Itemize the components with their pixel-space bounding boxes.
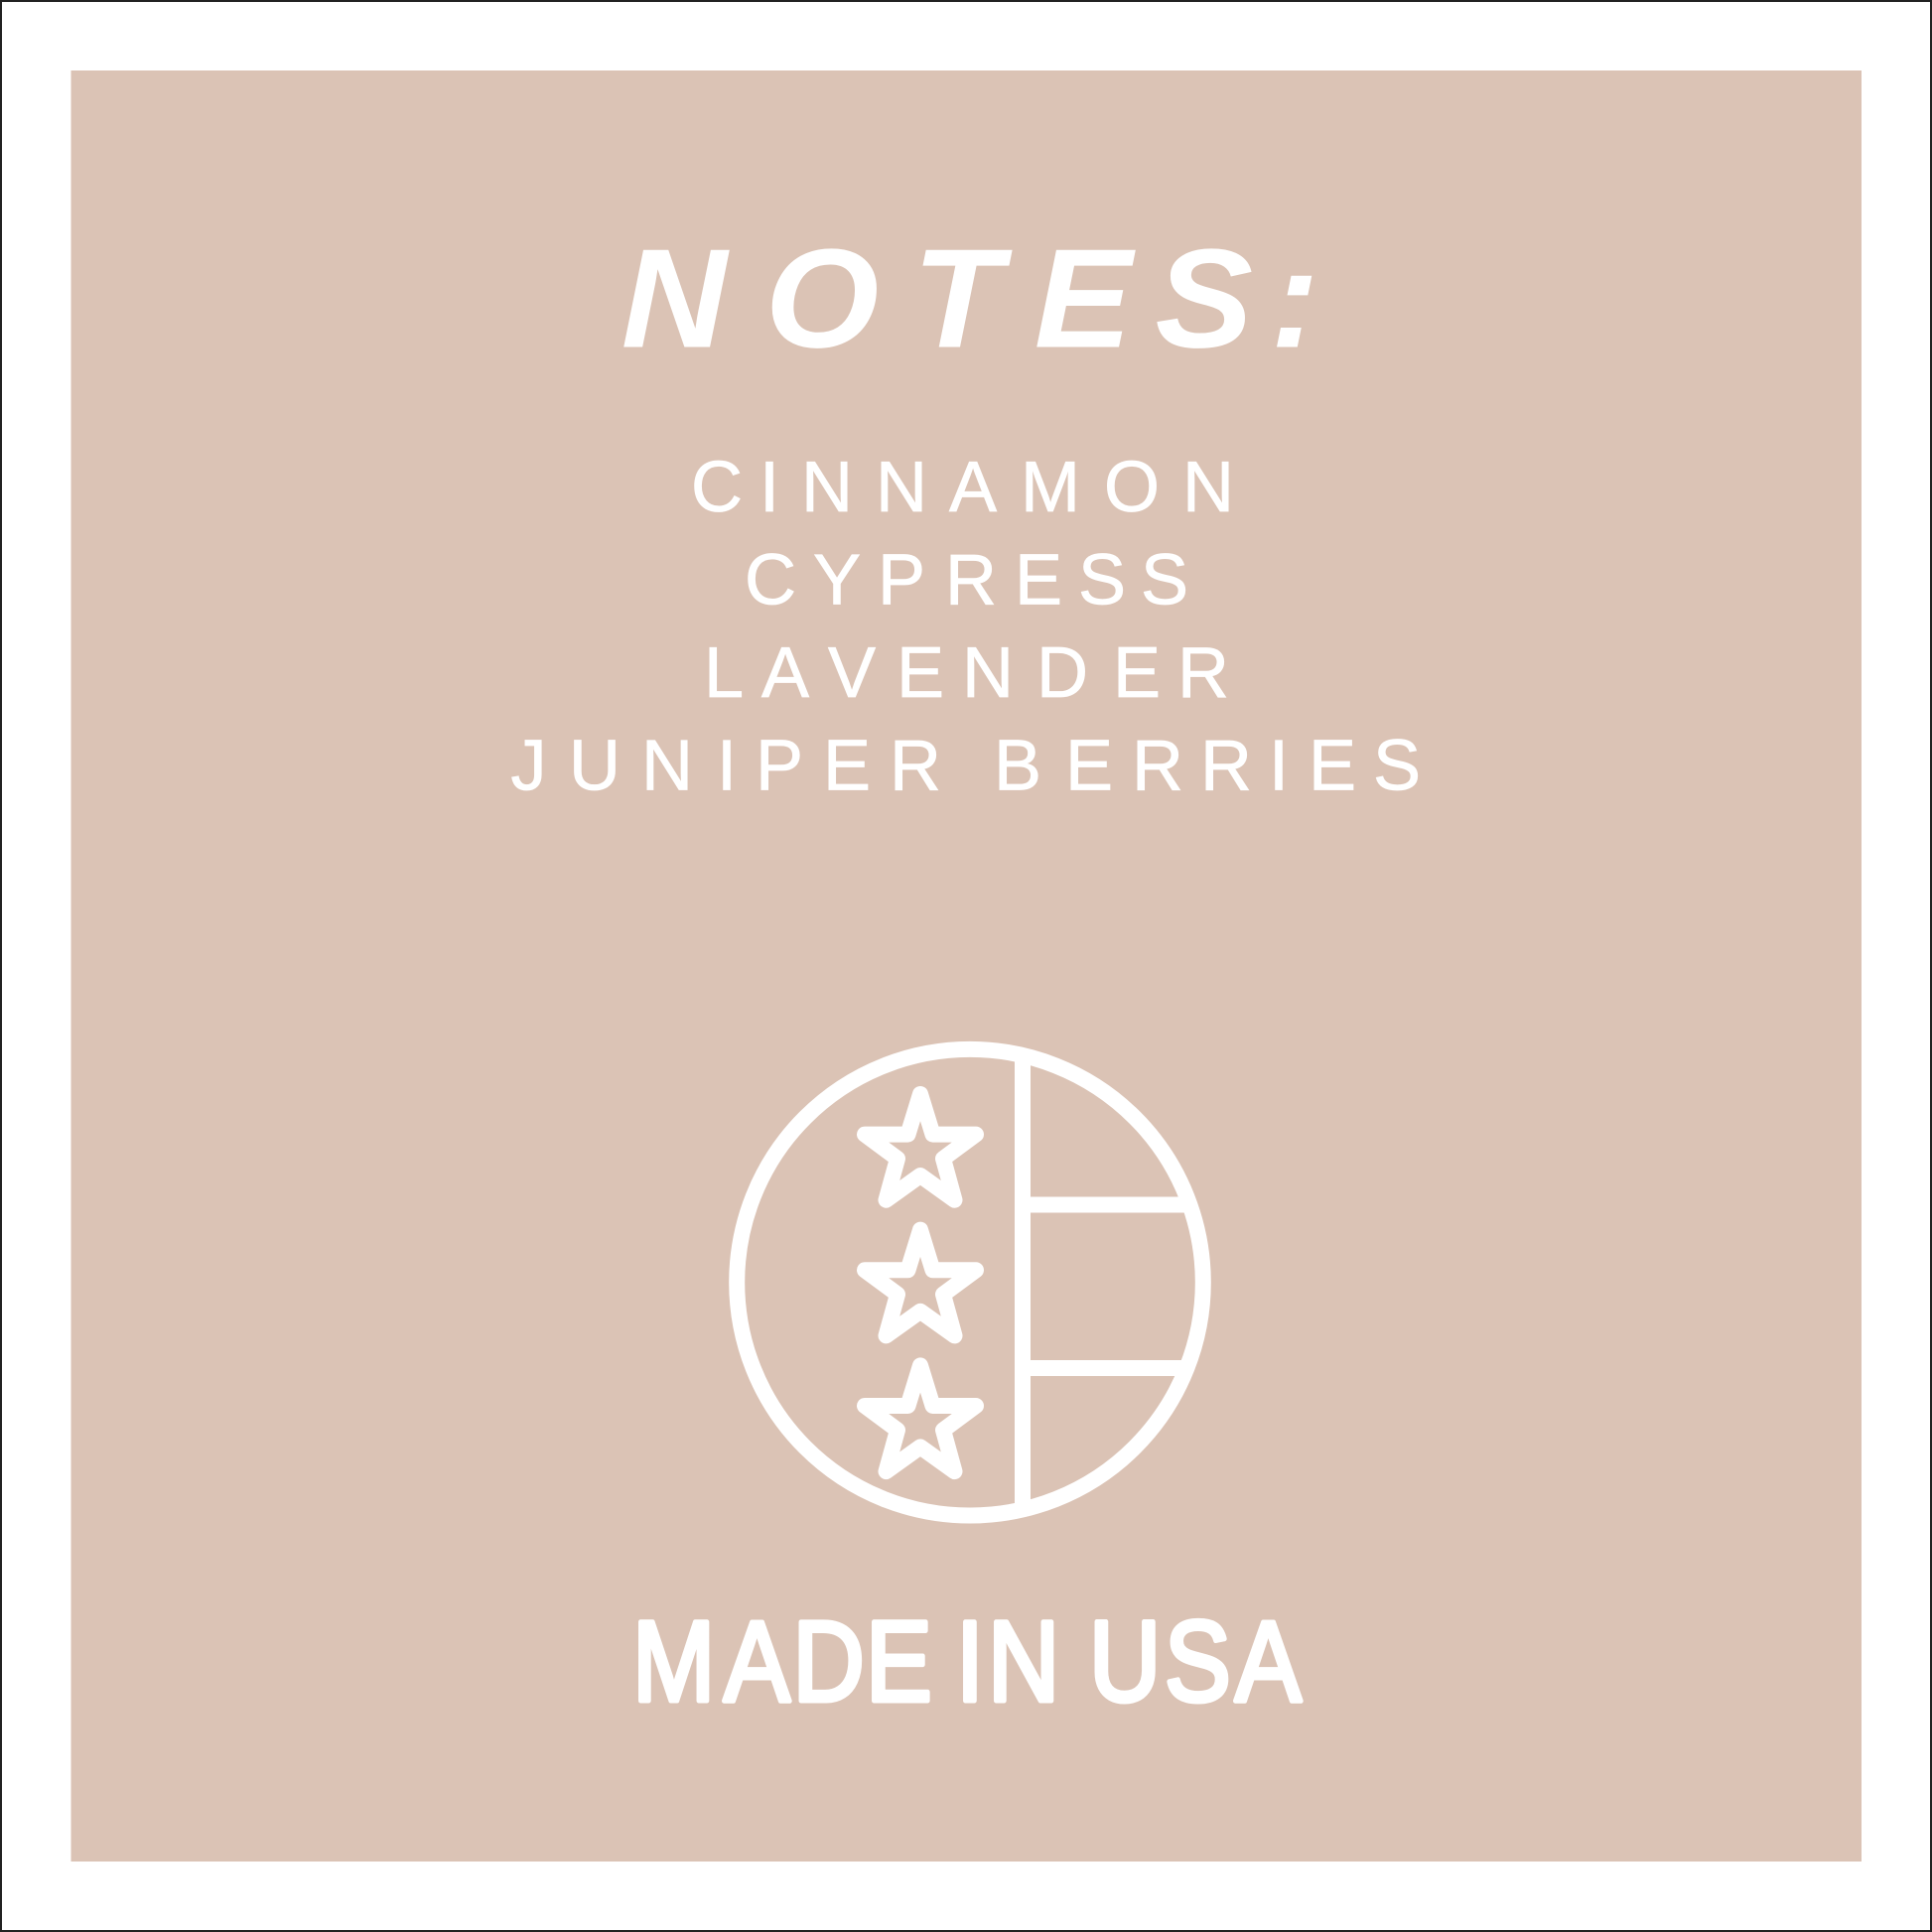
ingredient list <box>510 448 1421 806</box>
icon: upper stripe <box>1023 1197 1189 1213</box>
icon: bottom star <box>865 1365 976 1471</box>
ingredient: cypress: CYPRESS <box>745 540 1188 620</box>
ingredient: juniper berries: JUNIPER BERRIES <box>510 727 1421 806</box>
title: notes: NOTES: <box>621 219 1319 377</box>
icon: top star <box>865 1094 976 1200</box>
ingredient: lavender: LAVENDER <box>704 633 1229 713</box>
icon: vertical divider <box>1015 1055 1031 1510</box>
icon: circle with three stars and stripes <box>737 1049 1203 1515</box>
icon: lower stripe <box>1023 1360 1186 1376</box>
icon: globe circle <box>737 1049 1203 1515</box>
ingredient: cinnamon: CINNAMON <box>691 448 1234 527</box>
icon: middle star <box>865 1230 976 1335</box>
label: made in usa: MADE IN USA <box>632 1596 1302 1725</box>
